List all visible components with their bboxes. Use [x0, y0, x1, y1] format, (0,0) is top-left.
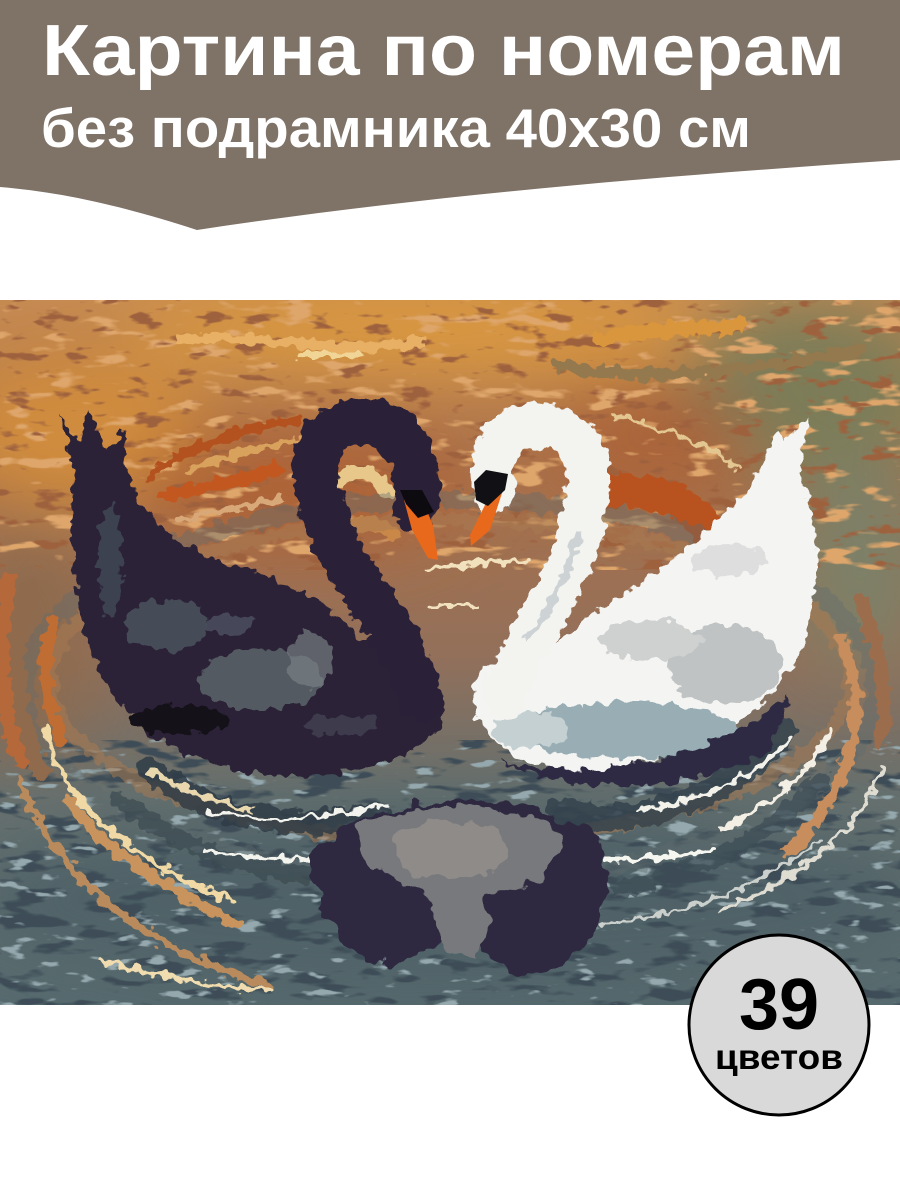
black swan body — [58, 410, 445, 776]
white swan — [470, 418, 816, 786]
cool brush texture — [0, 740, 900, 1005]
water background — [0, 290, 900, 1005]
painting: two swans — [0, 290, 900, 1005]
surface ripples and highlights — [1, 325, 884, 990]
white swan neck shade — [525, 530, 578, 640]
warm brush texture — [0, 300, 900, 570]
black swan neck — [316, 421, 420, 700]
reflection dark lobes — [312, 800, 608, 975]
black swan face mark — [400, 490, 434, 518]
subtitle: без подрамника 40х30 см — [41, 97, 751, 159]
black swan — [58, 410, 445, 776]
badge: 39 colours — [689, 935, 869, 1115]
reflection grey centre — [355, 807, 568, 960]
black swan beak — [404, 500, 438, 560]
title: Картина по номерам — [42, 11, 845, 91]
colour count: 39 — [739, 965, 819, 1045]
white swan shadow on water — [500, 695, 790, 786]
white swan beak — [470, 490, 503, 546]
deep brush texture — [0, 300, 900, 570]
black swan feather shading — [98, 505, 378, 735]
white swan face mark — [474, 470, 508, 506]
white swan body — [472, 418, 816, 771]
header banner — [0, 0, 900, 230]
reflection of swans — [312, 800, 608, 975]
white swan feather shading — [492, 544, 783, 758]
colours label: цветов — [715, 1038, 843, 1077]
reflection pale patch — [392, 820, 508, 880]
white swan neck — [492, 424, 588, 695]
pale brush texture — [0, 740, 900, 1005]
